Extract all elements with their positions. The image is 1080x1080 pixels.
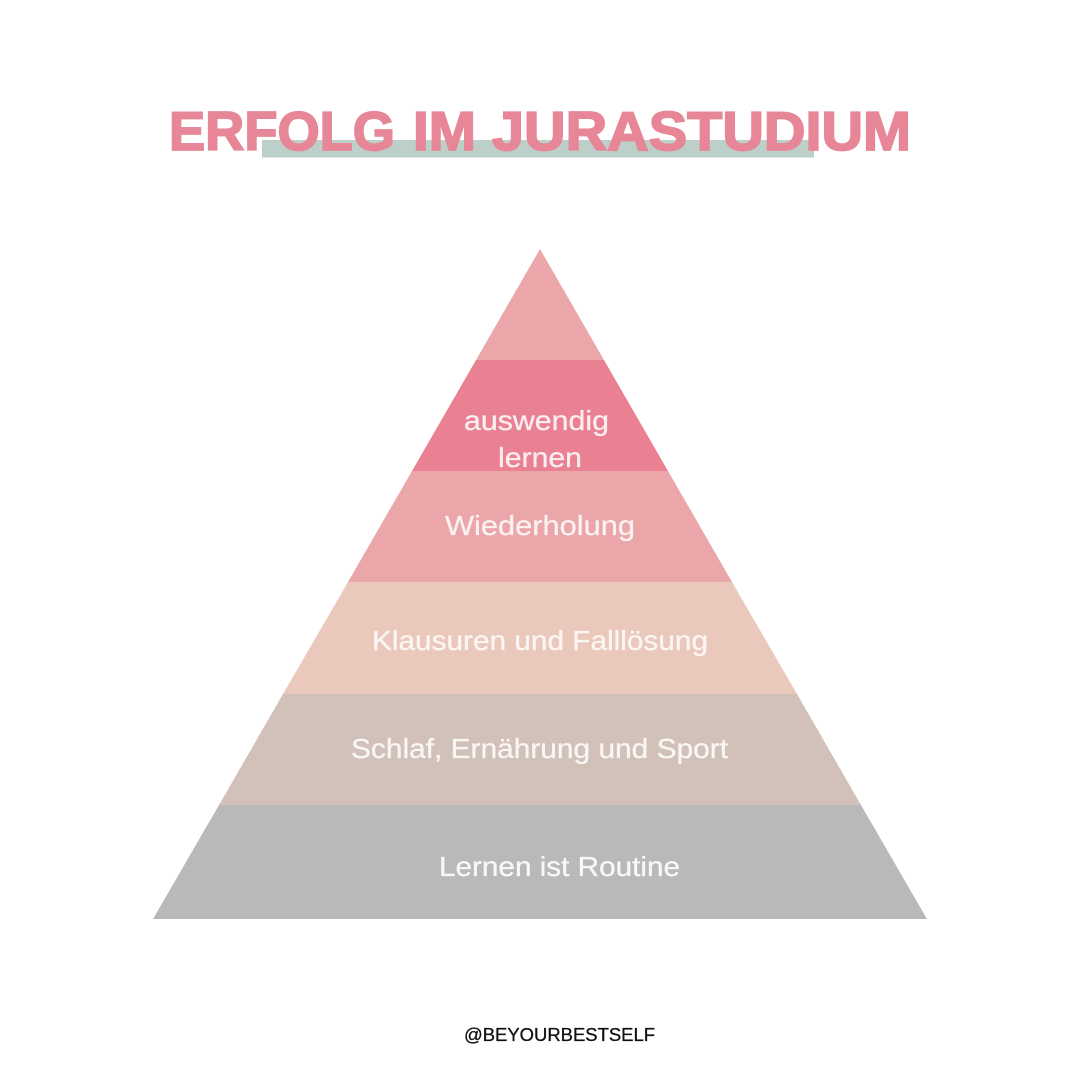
footer handle: @BEYOURBESTSELF bbox=[464, 1025, 655, 1045]
tier 4: Klausuren und Falllösung: Klausuren und Falllösung bbox=[372, 625, 708, 656]
tier 5: Schlaf, Ernährung und Sport bbox=[219, 694, 861, 805]
title text: IM bbox=[413, 100, 476, 162]
tier 2: auswendig lernen: lernen bbox=[498, 442, 582, 473]
title text: ERFOLG bbox=[169, 100, 395, 162]
title text: JURASTUDIUM bbox=[492, 100, 911, 162]
tier 3: Wiederholung: Wiederholung bbox=[445, 510, 635, 541]
tier 5: Schlaf, Ernährung und Sport: Schlaf, Ernährung und Sport bbox=[351, 733, 728, 764]
title highlight bar bbox=[262, 140, 814, 158]
tier 2: auswendig lernen: auswendig bbox=[464, 405, 609, 436]
title with highlight bar bbox=[169, 100, 911, 162]
tier 4: Klausuren und Falllösung bbox=[283, 582, 797, 694]
tier 6: Lernen ist Routine: Lernen ist Routine bbox=[439, 851, 680, 882]
tier 3: Wiederholung bbox=[348, 471, 732, 582]
tier 1: empty apex bbox=[476, 249, 604, 360]
pyramid bbox=[153, 249, 927, 919]
tier 6: Lernen ist Routine bbox=[153, 805, 927, 919]
title text bbox=[169, 100, 911, 162]
tier 2: auswendig lernen bbox=[412, 360, 668, 473]
